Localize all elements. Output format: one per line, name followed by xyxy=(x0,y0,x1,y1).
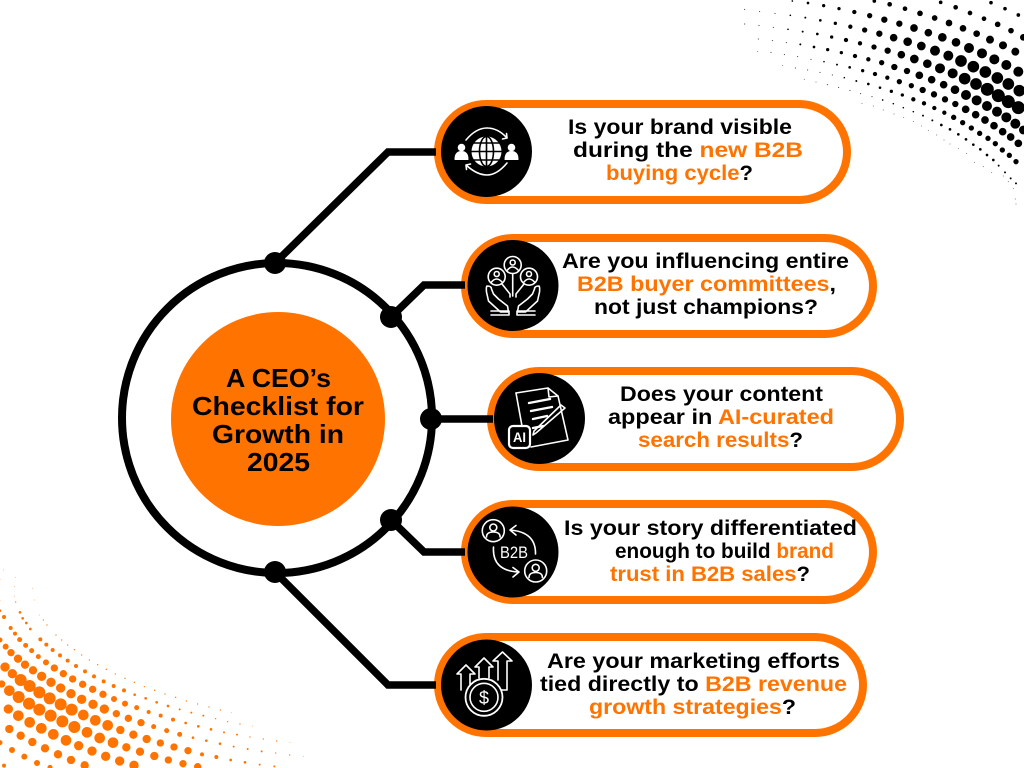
panel: question 1 pill: during the new B2B xyxy=(573,138,803,162)
halftone: black top right xyxy=(745,1,1023,204)
panel: question 3 pill xyxy=(491,371,900,467)
panel: question 4 pill: enough to build brand xyxy=(615,539,834,563)
panel: question 2 pill xyxy=(465,238,873,334)
icon: revenue growth arrows and coin xyxy=(457,652,512,716)
panel: question 5 pill: tied directly to B2B revenue xyxy=(540,672,847,696)
icon: globe with people xyxy=(455,128,518,175)
icon: B2B exchange xyxy=(482,520,547,582)
title badge: A CEO’s xyxy=(226,363,331,393)
panel: question 1 pill xyxy=(438,104,847,200)
panel: question 4 pill: trust in B2B sales? xyxy=(610,562,810,586)
panel: question 2 pill: not just champions? xyxy=(594,295,818,319)
panel: question 5 pill xyxy=(438,637,863,733)
panel: question 4 pill xyxy=(465,504,873,600)
icon: hands holding people xyxy=(486,256,540,315)
connectors and nodes xyxy=(264,152,493,685)
halftone: orange bottom left xyxy=(0,570,303,767)
title badge: 2025 xyxy=(247,447,310,477)
panel: question 2 pill: Are you influencing entire xyxy=(562,249,849,273)
panel: question 5 pill: growth strategies ? xyxy=(589,695,796,719)
title badge xyxy=(171,312,385,526)
title badge: Growth in xyxy=(212,419,344,449)
panel: question 1 pill: Is your brand visible xyxy=(568,115,792,139)
icon: AI document with pencil xyxy=(509,388,568,448)
icon: B2B exchange: B2B xyxy=(500,543,528,562)
panel: question 1 pill: buying cycle? xyxy=(606,161,753,185)
panel: question 3 pill: search results ? xyxy=(638,428,803,452)
title badge: Checklist for xyxy=(192,391,364,421)
panel: question 4 pill: Is your story differentiated xyxy=(564,516,857,540)
icon: AI document with pencil: AI xyxy=(513,429,526,445)
panel: question 2 pill: B2B buyer committees , xyxy=(577,272,836,296)
panel: question 3 pill: Does your content xyxy=(620,382,823,406)
main ring xyxy=(122,263,432,573)
panel: question 5 pill: Are your marketing efforts xyxy=(547,649,840,673)
icon: revenue growth arrows and coin: $ xyxy=(479,688,489,708)
panel: question 3 pill: appear in AI-curated xyxy=(608,405,834,429)
